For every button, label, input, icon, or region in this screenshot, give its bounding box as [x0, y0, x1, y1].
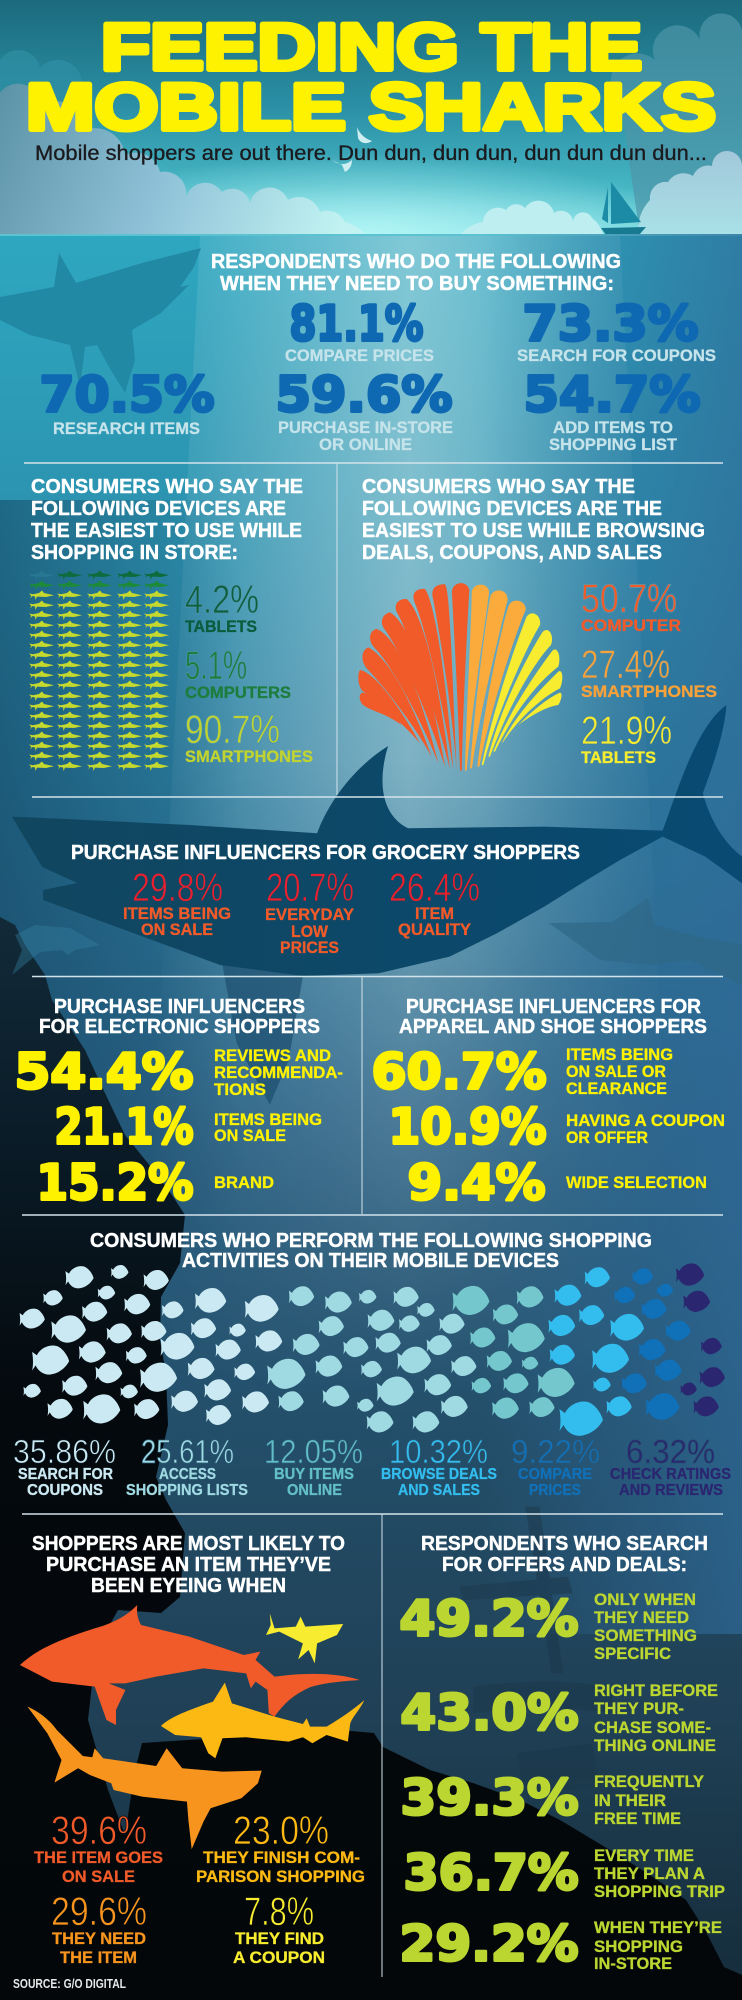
distant shark silhouette, top left [0, 248, 201, 393]
stat: search for coupons: COUPONS [27, 1482, 103, 1499]
stat: items being on sale: 21.1% [54, 1098, 194, 1156]
heading: browsing deals: FOLLOWING DEVICES ARE THE [362, 498, 662, 520]
stat: items being on sale: ITEMS BEING [123, 904, 231, 923]
stat: smartphones: 27.4% [581, 643, 670, 687]
stat: computer: 50.7% [581, 577, 677, 621]
heading: offers and deals [421, 1533, 708, 1576]
stat: tablets: TABLETS [185, 617, 257, 636]
stat: they finish comparison shopping [196, 1809, 365, 1886]
stat: everyday low prices: PRICES [280, 938, 339, 957]
stat: item quality: QUALITY [398, 920, 472, 939]
stat: the item goes on sale [34, 1809, 163, 1886]
stat: buy items online: BUY ITEMS [274, 1466, 354, 1483]
heading: electronic: FOR ELECTRONIC SHOPPERS [39, 1016, 320, 1038]
stat: items being on sale: ON SALE [214, 1126, 286, 1145]
stat: right before they purchase something online: RIGHT BEFORE [594, 1681, 718, 1700]
chart: school of fish [20, 1263, 725, 1436]
stat: they need the item [51, 1890, 147, 1967]
big shark silhouette [12, 705, 742, 1105]
source line: SOURCE: G/O DIGITAL [13, 1977, 126, 1991]
stat: tablets: TABLETS [581, 748, 656, 767]
heading: activities: CONSUMERS WHO PERFORM THE FOLLOWING SHOPPING [90, 1230, 652, 1252]
heading: in store [31, 476, 303, 564]
stat: items being on sale: ON SALE [141, 920, 213, 939]
stat: purchase in-store or online: OR ONLINE [319, 435, 412, 454]
stat: when they're shopping in-store: 29.2% [400, 1916, 578, 1972]
stat: items being on sale [123, 866, 231, 939]
stat: only when they need something specific: SOMETHING [594, 1626, 697, 1645]
heading: electronic: PURCHASE INFLUENCERS [54, 996, 305, 1018]
stat: frequently in their free time [400, 1770, 705, 1828]
heading: eyeing an item: SHOPPERS ARE MOST LIKELY TO [32, 1533, 345, 1555]
stat: brand: 15.2% [36, 1154, 194, 1212]
stat: research items: 70.5% [40, 366, 214, 424]
panel: what respondents do [40, 251, 716, 454]
stat: they find a coupon: 7.8% [244, 1890, 314, 1934]
heading: apparel: APPAREL AND SHOE SHOPPERS [399, 1016, 707, 1038]
stat: add items to shopping list: 54.7% [524, 366, 700, 424]
stat: wide selection: WIDE SELECTION [566, 1173, 707, 1192]
title: FEEDING THE [101, 10, 642, 84]
panel: apparel and shoe shoppers [372, 996, 725, 1212]
stat: brand: BRAND [214, 1173, 274, 1192]
stat: they finish comparison shopping: PARISON SHOPPING [196, 1867, 365, 1886]
stat: they find a coupon: A COUPON [233, 1948, 325, 1967]
shipwreck silhouette [459, 1507, 615, 1793]
stat: having a coupon or offer: 10.9% [388, 1098, 546, 1156]
stat: wide selection: 9.4% [408, 1154, 546, 1212]
stat: wide selection [408, 1154, 707, 1212]
stat: only when they need something specific [400, 1590, 697, 1663]
stat: compare prices: 9.22% [511, 1433, 600, 1470]
stat: every time they plan a shopping trip [404, 1844, 725, 1902]
stat: they find a coupon [233, 1890, 325, 1967]
stat: only when they need something specific: SPECIFIC [594, 1644, 671, 1663]
stat: computer: COMPUTER [581, 616, 681, 635]
chart: scallop shell [358, 583, 562, 771]
heading: in store: SHOPPING IN STORE: [31, 542, 238, 564]
stat: having a coupon or offer: OR OFFER [566, 1128, 648, 1147]
stat: items being on sale [54, 1098, 322, 1156]
stat: check ratings and reviews: AND REVIEWS [619, 1482, 723, 1499]
heading: apparel [399, 996, 707, 1038]
stat: smartphones [185, 708, 313, 766]
stat: check ratings and reviews [610, 1433, 731, 1499]
stat: the item goes on sale: ON SALE [62, 1867, 135, 1886]
stat: they find a coupon: THEY FIND [235, 1929, 324, 1948]
heading: respondents: WHEN THEY NEED TO BUY SOMETHING: [220, 273, 614, 295]
panel: easiest devices for deals [358, 476, 717, 771]
stat: add items to shopping list: ADD ITEMS TO [553, 418, 673, 437]
stat: right before they purchase something online [400, 1681, 718, 1755]
panel: shopping activities on mobile [13, 1230, 731, 1499]
stat: only when they need something specific: ONLY WHEN [594, 1590, 696, 1609]
stat: buy items online: ONLINE [287, 1482, 342, 1499]
stat: purchase in-store or online: PURCHASE IN-STORE [278, 418, 453, 437]
stat: frequently in their free time: IN THEIR [594, 1791, 666, 1810]
panel: electronic shoppers [14, 996, 343, 1212]
subtitle: Mobile shoppers are out there. Dun dun, dun dun, dun dun dun dun... [35, 142, 707, 165]
heading: eyeing an item: PURCHASE AN ITEM THEY’VE [46, 1554, 331, 1576]
heading: grocery: PURCHASE INFLUENCERS FOR GROCERY SHOPPERS [71, 842, 580, 864]
heading: browsing deals: CONSUMERS WHO SAY THE [362, 476, 635, 498]
stat: tablets [581, 709, 672, 767]
heading: electronic [39, 996, 320, 1038]
stat: computers [185, 644, 291, 702]
stat: the item goes on sale: THE ITEM GOES [34, 1848, 163, 1867]
stat: smartphones: 90.7% [185, 708, 280, 752]
stat: only when they need something specific: 49.2% [400, 1590, 578, 1648]
stat: search for coupons: 35.86% [13, 1433, 116, 1470]
stat: right before they purchase something online: THING ONLINE [594, 1736, 716, 1755]
stat: access shopping lists: 25.61% [141, 1433, 234, 1470]
heading: apparel: PURCHASE INFLUENCERS FOR [406, 996, 702, 1018]
stat: the item goes on sale: 39.6% [51, 1809, 147, 1853]
distant shark silhouette, lower left [12, 925, 100, 975]
stat: purchase in-store or online: 59.6% [276, 366, 452, 424]
heading: eyeing an item: BEEN EYEING WHEN [91, 1575, 286, 1597]
heading: offers and deals: RESPONDENTS WHO SEARCH [421, 1533, 708, 1555]
stat: computers: 5.1% [185, 644, 247, 688]
stat: every time they plan a shopping trip: THEY PLAN A [594, 1864, 705, 1883]
stat: they finish comparison shopping: 23.0% [233, 1809, 329, 1853]
stat: access shopping lists [126, 1433, 248, 1499]
stat: everyday low prices: LOW [291, 922, 329, 941]
icon: seagulls [332, 127, 372, 172]
stat: reviews and recommendations: 54.4% [14, 1044, 194, 1100]
stat: compare prices: COMPARE [518, 1466, 592, 1483]
stat: every time they plan a shopping trip: 36.7% [404, 1844, 578, 1902]
stat: they need the item: THEY NEED [52, 1929, 146, 1948]
stat: everyday low prices [265, 866, 355, 957]
stat: everyday low prices: EVERYDAY [265, 905, 355, 924]
stat: compare prices: 81.1% [290, 296, 424, 352]
reef silhouette [0, 917, 742, 2000]
stat: when they're shopping in-store: SHOPPING [594, 1937, 683, 1956]
heading: activities: ACTIVITIES ON THEIR MOBILE DEVICES [182, 1250, 559, 1272]
stat: tablets: 4.2% [185, 578, 259, 622]
stat: item quality: 26.4% [389, 866, 480, 910]
heading: browsing deals: DEALS, COUPONS, AND SALES [362, 542, 662, 564]
stat: check ratings and reviews: 6.32% [626, 1433, 715, 1470]
stat: tablets: 21.9% [581, 709, 672, 753]
stat: search for coupons [13, 1433, 116, 1499]
stat: browse deals and sales: 10.32% [389, 1433, 488, 1470]
stat: reviews and recommendations [14, 1044, 343, 1100]
stat: frequently in their free time: FREQUENTLY [594, 1772, 705, 1791]
stat: computers: COMPUTERS [185, 683, 291, 702]
stat: research items: RESEARCH ITEMS [53, 419, 200, 438]
heading: respondents [211, 251, 621, 295]
stat: items being on sale: ITEMS BEING [214, 1110, 322, 1129]
title: MOBILE SHARKS [26, 70, 716, 144]
stat: right before they purchase something online: CHASE SOME- [594, 1718, 711, 1737]
stat: buy items online: 12.05% [264, 1433, 363, 1470]
stat: compare prices [285, 296, 434, 365]
stat: they finish comparison shopping: THEY FINISH COM- [203, 1848, 360, 1867]
stat: reviews and recommendations: REVIEWS AND [214, 1046, 331, 1065]
stat: items on sale or clearance: ITEMS BEING [566, 1045, 673, 1064]
stat: check ratings and reviews: CHECK RATINGS [610, 1466, 731, 1483]
stat: access shopping lists: ACCESS [159, 1466, 216, 1483]
panel: grocery shoppers [71, 842, 580, 957]
heading: browsing deals: EASIEST TO USE WHILE BROWSING [362, 520, 705, 542]
panel: most likely to purchase when [20, 1533, 365, 1967]
stat: they need the item: THE ITEM [60, 1948, 137, 1967]
stat: only when they need something specific: THEY NEED [594, 1608, 689, 1627]
stat: computer [581, 577, 681, 635]
stat: having a coupon or offer: HAVING A COUPON [566, 1111, 725, 1130]
stat: search for coupons: 73.3% [522, 296, 698, 352]
heading: activities [90, 1230, 652, 1272]
stat: add items to shopping list [524, 366, 700, 454]
stat: frequently in their free time: 39.3% [400, 1770, 578, 1826]
stat: every time they plan a shopping trip: EVERY TIME [594, 1846, 694, 1865]
stat: items on sale or clearance: CLEARANCE [566, 1079, 667, 1098]
stat: browse deals and sales: BROWSE DEALS [381, 1466, 497, 1483]
chart: grid of 100 small sharks [29, 570, 169, 771]
heading: eyeing an item [32, 1533, 345, 1597]
stat: add items to shopping list: SHOPPING LIST [549, 435, 678, 454]
stat: item quality [389, 866, 480, 939]
stat: compare prices [511, 1433, 600, 1499]
stat: browse deals and sales [381, 1433, 497, 1499]
panel: easiest devices in store [29, 476, 313, 771]
stat: frequently in their free time: FREE TIME [594, 1809, 681, 1828]
stat: right before they purchase something online: 43.0% [400, 1684, 578, 1742]
icon: sailboat [601, 182, 646, 235]
stat: smartphones [581, 643, 717, 701]
stat: browse deals and sales: AND SALES [398, 1482, 480, 1499]
panel: search for offers and deals [400, 1533, 725, 1973]
clouds [0, 84, 742, 234]
stat: items being on sale: 29.8% [132, 866, 223, 910]
stat: search for coupons: SEARCH FOR COUPONS [517, 346, 716, 365]
background: sky [0, 0, 742, 235]
stat: compare prices: COMPARE PRICES [285, 346, 434, 365]
stat: smartphones: SMARTPHONES [185, 747, 313, 766]
stat: when they're shopping in-store [400, 1916, 722, 1973]
stat: everyday low prices: 20.7% [266, 866, 354, 910]
stat: items on sale or clearance [372, 1044, 673, 1100]
heading: browsing deals [362, 476, 705, 564]
stat: items on sale or clearance: ON SALE OR [566, 1062, 666, 1081]
stat: compare prices: PRICES [529, 1482, 581, 1499]
stat: they need the item: 29.6% [51, 1890, 147, 1934]
stat: tablets [185, 578, 259, 636]
stat: every time they plan a shopping trip: SHOPPING TRIP [594, 1882, 725, 1901]
stat: purchase in-store or online [276, 366, 453, 454]
heading: respondents: RESPONDENTS WHO DO THE FOLLOWING [211, 251, 621, 273]
heading: in store: FOLLOWING DEVICES ARE [31, 498, 286, 520]
title [26, 10, 716, 144]
heading: in store: THE EASIEST TO USE WHILE [31, 520, 302, 542]
stat: reviews and recommendations: TIONS [214, 1080, 266, 1099]
chart: four sharks sized by share [20, 1605, 364, 1849]
heading: in store: CONSUMERS WHO SAY THE [31, 476, 303, 498]
stat: having a coupon or offer [388, 1098, 725, 1156]
stat: search for coupons: SEARCH FOR [18, 1466, 113, 1483]
stat: item quality: ITEM [415, 904, 454, 923]
stat: access shopping lists: SHOPPING LISTS [126, 1482, 248, 1499]
heading: offers and deals: FOR OFFERS AND DEALS: [442, 1554, 687, 1576]
stat: smartphones: SMARTPHONES [581, 682, 717, 701]
stat: when they're shopping in-store: WHEN THEY’RE [594, 1918, 722, 1937]
stat: buy items online [264, 1433, 363, 1499]
stat: right before they purchase something online: THEY PUR- [594, 1699, 684, 1718]
distant shark silhouette, lower right [549, 898, 742, 985]
stat: reviews and recommendations: RECOMMENDA- [214, 1063, 343, 1082]
stat: items on sale or clearance: 60.7% [372, 1044, 546, 1100]
stat: when they're shopping in-store: IN-STORE [594, 1954, 672, 1973]
